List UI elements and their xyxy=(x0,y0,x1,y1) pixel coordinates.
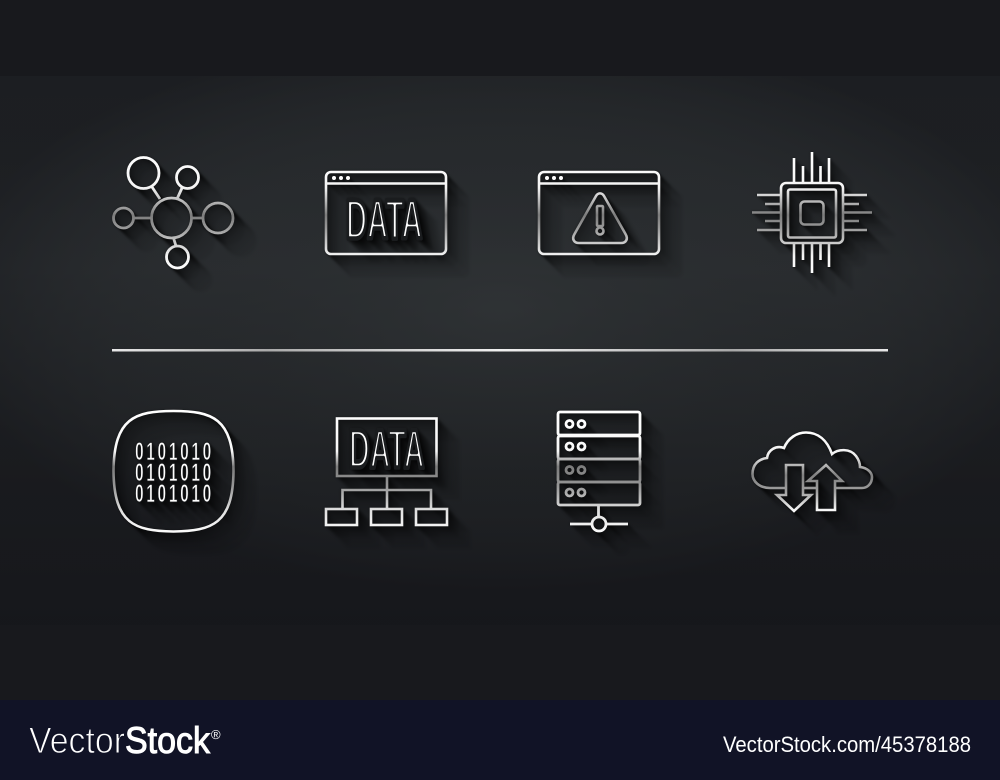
divider line xyxy=(112,349,888,352)
binary digits: 0101010 xyxy=(135,438,211,466)
icon: browser window with warning xyxy=(539,172,659,254)
label: DATA: DATA xyxy=(346,190,422,251)
icon: processor chip xyxy=(752,152,872,273)
binary digits: 0101010 xyxy=(135,480,211,508)
logo: VectorStock: ® xyxy=(211,727,221,742)
logo: VectorStock: Vector xyxy=(29,720,125,761)
footer: image id: VectorStock.com/45378188 xyxy=(723,732,971,757)
icon: molecule network xyxy=(114,158,233,268)
label: DATA: DATA xyxy=(349,419,424,480)
binary digits: 0101010 xyxy=(135,459,211,487)
icon: DATA hierarchy diagram xyxy=(326,418,447,525)
icon: server rack xyxy=(558,412,640,531)
binary digits xyxy=(135,438,211,508)
logo: VectorStock: Stock xyxy=(125,720,210,761)
panel: footer band xyxy=(0,700,1000,780)
icon: browser window with DATA xyxy=(326,172,446,254)
panel: central background xyxy=(0,76,1000,625)
icon: cloud upload and download xyxy=(752,432,872,511)
icon: binary code chip xyxy=(114,411,234,532)
logo: VectorStock xyxy=(29,720,221,761)
